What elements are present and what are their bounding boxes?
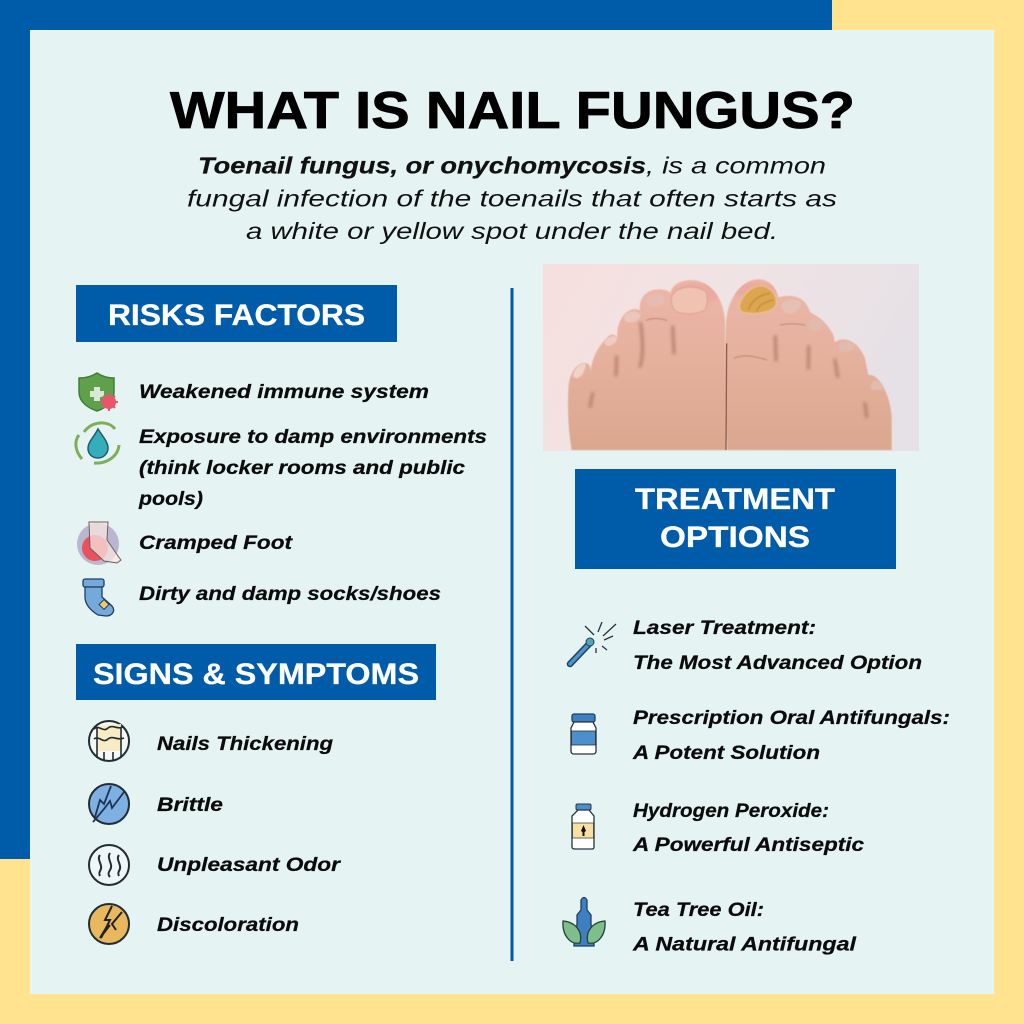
- intro text: , is a common: [646, 152, 826, 178]
- heading: treatment options: OPTIONS: [660, 521, 810, 554]
- icon: shield: [79, 373, 118, 411]
- heading: risks factors: [76, 285, 397, 342]
- text: prescription oral antifungals: A Potent Solution: [632, 742, 820, 764]
- intro text: [187, 152, 837, 244]
- text: hydrogen peroxide: Hydrogen Peroxide:: [633, 800, 829, 822]
- icon: water cycle: [76, 423, 119, 463]
- icon: unpleasant odor: [89, 845, 129, 885]
- intro text: Toenail fungus, or onychomycosis: [198, 152, 646, 178]
- icon: brittle: [89, 784, 129, 824]
- text: exposure to damp environments: [138, 426, 487, 510]
- text: tea tree oil: [632, 899, 857, 956]
- text: dirty and damp socks: Dirty and damp socks/shoes: [139, 583, 441, 605]
- text: unpleasant odor: Unpleasant Odor: [157, 854, 342, 876]
- heading: risks factors: RISKS FACTORS: [108, 299, 365, 332]
- icon: discoloration: [89, 904, 129, 944]
- text: brittle: Brittle: [157, 794, 223, 816]
- text: tea tree oil: Tea Tree Oil:: [633, 899, 764, 921]
- text: exposure to damp environments: (think locker rooms and public: [139, 457, 465, 479]
- blue corner block: [0, 0, 832, 859]
- photo: toes with nail fungus: [543, 264, 919, 451]
- heading: treatment options: [575, 469, 896, 569]
- text: nails thickening: Nails Thickening: [157, 733, 333, 755]
- text: exposure to damp environments: Exposure to damp environments: [139, 426, 487, 448]
- text: weakened immune system: Weakened immune system: [139, 381, 429, 403]
- text: tea tree oil: A Natural Antifungal: [632, 934, 857, 956]
- icon: laser wand: [570, 622, 616, 664]
- icon: sock: [83, 579, 114, 616]
- text: prescription oral antifungals: [632, 707, 950, 764]
- text: exposure to damp environments: pools): [138, 488, 203, 510]
- heading: treatment options: TREATMENT: [635, 483, 835, 516]
- text: cramped foot: Cramped Foot: [139, 532, 294, 554]
- title: WHAT IS NAIL FUNGUS?: [170, 82, 855, 140]
- icon: nails thickening: [89, 721, 129, 761]
- heading: signs and symptoms: [76, 644, 436, 700]
- text: laser treatment: The Most Advanced Option: [633, 652, 922, 674]
- icon: peroxide bottle: [572, 804, 594, 849]
- intro text: fungal infection of the toenails that often starts as: [187, 186, 837, 212]
- text: prescription oral antifungals: Prescription Oral Antifungals:: [633, 707, 950, 729]
- text: laser treatment: Laser Treatment:: [633, 617, 816, 639]
- icon: cramped foot: [77, 522, 121, 565]
- text: hydrogen peroxide: [632, 800, 864, 856]
- icon: tea tree oil dropper: [563, 898, 605, 946]
- intro text: a white or yellow spot under the nail bed.: [246, 218, 778, 244]
- icon: pill bottle: [571, 714, 596, 754]
- text: discoloration: Discoloration: [157, 914, 299, 936]
- heading: signs and symptoms: SIGNS & SYMPTOMS: [93, 658, 419, 691]
- text: laser treatment: [633, 617, 922, 674]
- toe and foot shading: [590, 282, 867, 417]
- text: hydrogen peroxide: A Powerful Antiseptic: [632, 834, 864, 856]
